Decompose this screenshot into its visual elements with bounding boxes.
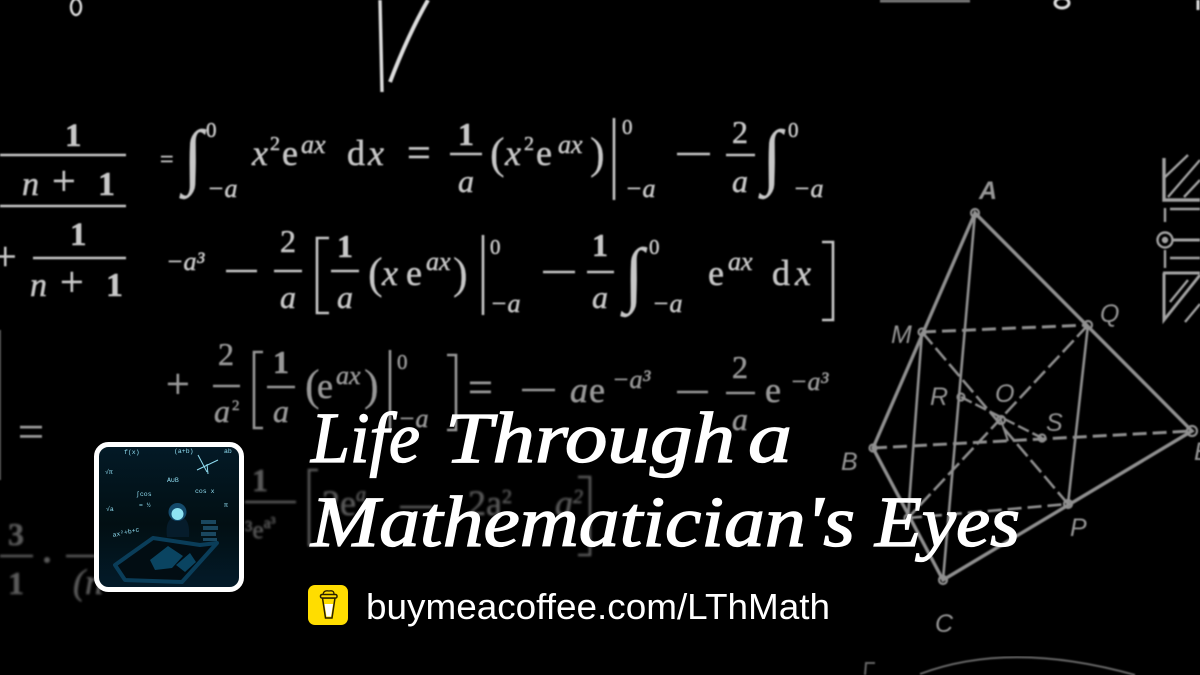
title: Eyes	[874, 482, 1020, 562]
equation row 1: 0	[206, 118, 216, 142]
title: Life	[310, 398, 420, 478]
equation row 2: a	[592, 279, 608, 315]
equation row 2: d	[772, 253, 790, 293]
equation row 2: 2	[280, 223, 296, 259]
equation row 2: ax	[728, 247, 753, 276]
equation row 1: −a	[625, 174, 656, 203]
equation row 1: 1	[98, 166, 115, 203]
equation row 1: +	[52, 159, 76, 205]
glowing formulas: ab	[224, 448, 232, 455]
equation row 2: ∫	[620, 234, 648, 318]
equation row 1	[0, 114, 824, 206]
equation row 3: −a	[398, 404, 429, 433]
equation row 3: =	[468, 363, 493, 412]
bottom arc fragment	[865, 657, 1135, 675]
equation row 1: (	[490, 129, 505, 178]
equation row 2: a	[280, 279, 296, 315]
equation row 2: x	[381, 253, 398, 293]
geometry diagram: S	[1046, 409, 1063, 437]
equation row 1: −a	[793, 174, 824, 203]
equation row 2: 1	[592, 227, 608, 263]
title	[310, 398, 1020, 562]
geometry diagram: O	[995, 380, 1014, 408]
equation row 1: 2	[524, 133, 534, 155]
glowing formulas: ax²+b+c	[112, 526, 140, 539]
quilt	[115, 538, 217, 582]
equation row 3: a	[273, 393, 289, 429]
equation row 1: 0	[788, 118, 798, 142]
glowing formulas: π	[224, 502, 228, 509]
star diagram	[197, 455, 218, 474]
glowing formulas: √π	[105, 468, 113, 476]
equation row 3: +	[166, 362, 190, 408]
geometry diagram	[841, 177, 1200, 638]
equation row 1: a	[458, 163, 474, 199]
equation row 1: ∫	[758, 116, 786, 200]
equation row 1: x	[251, 133, 268, 173]
glowing formulas: (a+b)	[174, 448, 194, 455]
equation row 4: 3	[8, 516, 24, 552]
glowing formulas: A∪B	[167, 477, 179, 484]
equation row 3: e	[765, 370, 781, 410]
glowing formulas: cos x	[195, 488, 215, 495]
equation row 2: −a	[652, 289, 683, 318]
glowing formulas: f(x)	[124, 449, 140, 456]
geometry diagram: M	[891, 321, 912, 349]
equation row 3: )	[364, 361, 379, 410]
glowing formulas: ∫cos	[136, 491, 152, 498]
title: a	[748, 398, 792, 478]
equation row 1: ax	[558, 130, 583, 159]
equation row 3: 2	[732, 349, 748, 385]
equation row 3: =	[18, 406, 44, 457]
equation row 2: n	[30, 267, 47, 304]
equation row 4: (n	[73, 562, 103, 602]
geometry diagram: Q	[1100, 300, 1119, 328]
equation row 1: 1	[458, 116, 474, 152]
equation row 3: a	[732, 401, 748, 437]
avatar	[96, 444, 242, 590]
books	[201, 520, 218, 541]
link text: buymeacoffee.com/LThMath	[366, 586, 830, 627]
equation row 1: ∫	[179, 116, 207, 200]
glowing formulas: = ½	[139, 501, 151, 509]
equation row 4: a	[356, 484, 366, 506]
equation row 1: x	[367, 133, 384, 173]
equation row 3: 1	[273, 344, 289, 380]
equation row 2: x	[794, 253, 811, 293]
equation row 3: 0	[397, 350, 408, 374]
equation row 3: 2	[218, 336, 234, 372]
icon: coffee cup badge	[308, 585, 348, 625]
equation row 3	[0, 330, 830, 480]
equation row 4: 2a	[468, 483, 502, 523]
equation row 3: a	[214, 393, 230, 429]
equation row 2: −a³	[166, 247, 206, 276]
equation row 4: a	[555, 483, 573, 523]
geometry diagram: R	[930, 383, 948, 411]
quilt pattern	[150, 546, 196, 572]
figure	[167, 518, 189, 537]
equation row 1: 1	[65, 118, 82, 154]
face	[172, 508, 184, 520]
equation row 1: 0	[622, 115, 632, 139]
equation row 2: ax	[426, 247, 451, 276]
title: Through	[445, 398, 735, 478]
equation row 2: 0	[649, 235, 660, 259]
equation row 1: −a	[207, 174, 238, 203]
equation row 2: e	[406, 253, 422, 293]
equation row 2: 1	[337, 228, 353, 264]
equation row 2: −a	[490, 289, 521, 318]
equation row 3: −a³	[612, 365, 652, 394]
equation row 2: 1	[106, 267, 123, 304]
equation row 2: (	[368, 249, 383, 298]
equation row 4: 1	[252, 462, 268, 498]
equation row 1: x	[504, 133, 521, 173]
glowing formulas: √a	[106, 505, 114, 513]
equation row 1: e	[536, 133, 552, 173]
equation row 1: =	[407, 131, 431, 177]
geometry diagram: A	[978, 177, 997, 205]
equation row 2	[0, 217, 833, 320]
equation row 1: 2	[270, 133, 280, 155]
equation row 4: a³	[264, 515, 276, 532]
equation row 2: )	[453, 249, 468, 298]
equation row 1: 2	[732, 114, 748, 150]
equation row 2: +	[60, 260, 84, 306]
equation row 4: ³e	[245, 517, 264, 544]
geometry diagram: C	[935, 610, 954, 638]
equation row 4: 1	[8, 565, 24, 601]
equation row 1: n	[22, 166, 39, 203]
equation row 3: a	[570, 370, 588, 410]
geometry diagram: P	[1070, 514, 1087, 542]
equation row 1: )	[590, 129, 605, 178]
equation row 4: 2e	[322, 483, 356, 523]
equation row 1: =	[160, 147, 174, 173]
equation row 4	[0, 462, 590, 602]
hair	[168, 503, 186, 521]
equation row 4: 2	[573, 486, 583, 508]
equation row 4: 2	[502, 486, 512, 508]
equation row 1: a	[732, 163, 748, 199]
title: Mathematician's	[310, 482, 855, 562]
glowing formulas	[105, 448, 232, 539]
equation row 3: (	[305, 361, 320, 410]
geometry diagram: B	[841, 448, 858, 476]
equation row 3: 2	[232, 398, 240, 414]
equation row 1: d	[347, 133, 365, 173]
equation row 2: e	[708, 253, 724, 293]
equation row 1: e	[282, 133, 298, 173]
equation row 3: e	[589, 370, 605, 410]
equation row 1: ax	[301, 130, 326, 159]
equation row 2: 1	[70, 217, 86, 253]
mechanical diagram at right edge	[1158, 155, 1200, 322]
equation row 3: ax	[336, 361, 361, 390]
equation row 3: −a³	[790, 367, 830, 396]
equation row 2: a	[337, 279, 353, 315]
equation row 2: 0	[490, 235, 500, 259]
equation row 3: e	[317, 366, 333, 406]
top fragments	[71, 0, 1198, 92]
